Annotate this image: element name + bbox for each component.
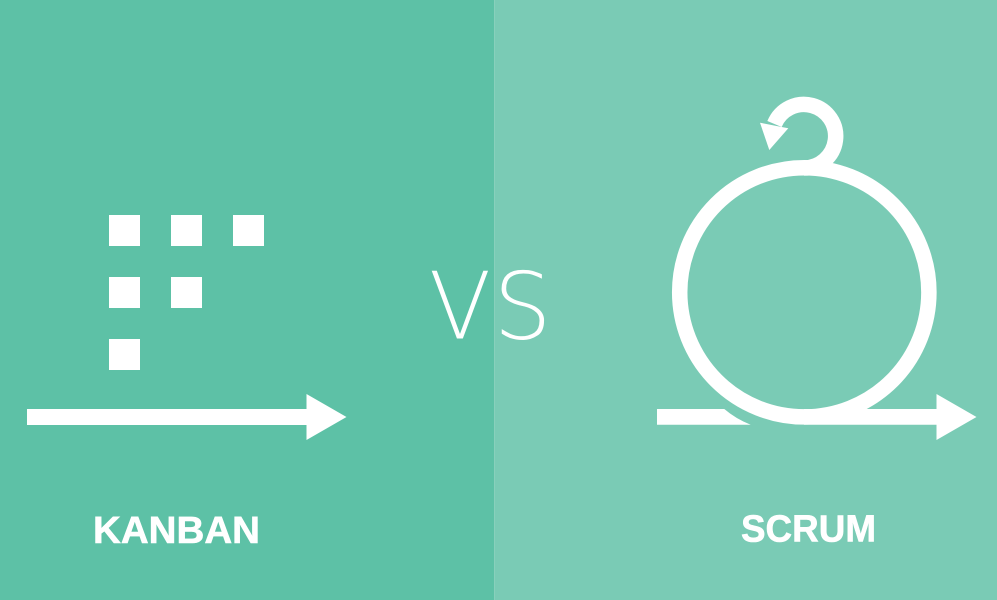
daily loop: [774, 104, 836, 168]
icon: kanban cards: [109, 215, 264, 370]
sprint circle: [680, 168, 929, 417]
arrow: kanban flow: [27, 394, 346, 440]
flow line left: [657, 409, 751, 425]
heading: vs: [429, 252, 552, 360]
panel: kanban: [0, 0, 494, 600]
flow arrow right: [804, 394, 976, 440]
heading: kanban: KANBAN: [93, 510, 260, 552]
icon: scrum cycle: [657, 104, 976, 440]
panel: scrum: [494, 0, 997, 600]
heading: vs: V: [429, 252, 491, 360]
loop arrowhead: [760, 123, 788, 150]
heading: vs: S: [494, 252, 552, 360]
divider: [494, 0, 495, 600]
heading: scrum: SCRUM: [741, 508, 876, 550]
